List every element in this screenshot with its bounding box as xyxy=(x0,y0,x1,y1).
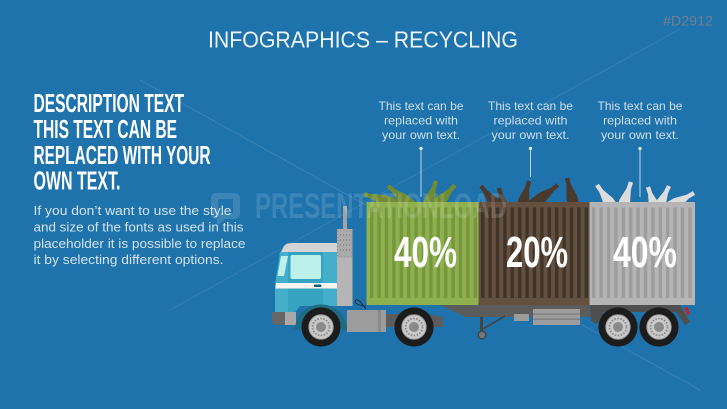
cab front window xyxy=(278,256,288,276)
container: grey 40%: 40% xyxy=(613,228,677,277)
heading: REPLACED WITH YOUR xyxy=(34,142,210,170)
grey bottles xyxy=(592,180,697,234)
callout: middle: your own text. xyxy=(492,128,570,142)
callout: left: replaced with xyxy=(384,114,458,128)
chassis xyxy=(386,314,443,327)
door handle xyxy=(314,284,322,287)
hose xyxy=(355,300,366,309)
callout: left: This text can be xyxy=(378,99,464,113)
callout: middle: This text can be xyxy=(488,99,573,113)
title: INFOGRAPHICS – RECYCLING xyxy=(208,26,518,52)
truck xyxy=(272,177,697,347)
trailer boxes xyxy=(514,314,529,321)
container: green 40%: 40% xyxy=(394,228,457,277)
white stripe xyxy=(276,283,337,288)
fuel tank xyxy=(347,310,386,332)
brown bottles xyxy=(477,177,584,236)
product code: #D2912 xyxy=(663,14,713,28)
heading: THIS TEXT CAN BE xyxy=(34,116,177,144)
watermark logo xyxy=(211,193,240,226)
callout: middle xyxy=(488,99,573,177)
wheel: rear 1 xyxy=(598,307,638,347)
wheel: front xyxy=(301,307,341,347)
watermark xyxy=(211,187,507,226)
callout: right xyxy=(598,99,683,197)
heading xyxy=(34,90,210,196)
landing gear xyxy=(478,316,505,339)
description text: placeholder it is possible to replace xyxy=(34,236,246,251)
container: brown 20%: 20% xyxy=(506,228,568,277)
cab xyxy=(272,243,347,330)
container: grey 40% xyxy=(590,202,695,305)
description text: it by selecting different options. xyxy=(34,252,224,267)
callout: right: replaced with xyxy=(603,114,677,128)
callout: left: your own text. xyxy=(382,128,460,142)
callout: right: This text can be xyxy=(598,99,683,113)
cab roof xyxy=(281,243,338,252)
heading: DESCRIPTION TEXT xyxy=(34,90,184,118)
container: brown 20% xyxy=(478,202,590,305)
bumper xyxy=(272,312,296,325)
fender xyxy=(295,304,347,330)
callout: right: your own text. xyxy=(601,128,679,142)
wheel: middle xyxy=(394,307,434,347)
callout: middle: replaced with xyxy=(494,114,568,128)
callout: left xyxy=(378,99,464,197)
heading: OWN TEXT. xyxy=(34,168,120,196)
container: green 40% xyxy=(366,202,478,305)
cab side window xyxy=(290,255,321,279)
exhaust stack xyxy=(337,206,352,306)
red tail light xyxy=(684,307,690,315)
cab body xyxy=(275,252,338,318)
description text: If you don’t want to use the style xyxy=(34,203,232,218)
description text: and size of the fonts as used in this xyxy=(34,220,244,234)
wheel: rear 2 xyxy=(639,307,679,347)
green bottles xyxy=(362,179,459,228)
description text xyxy=(34,203,246,267)
watermark text: PRESENTATIONLOAD xyxy=(255,187,507,226)
